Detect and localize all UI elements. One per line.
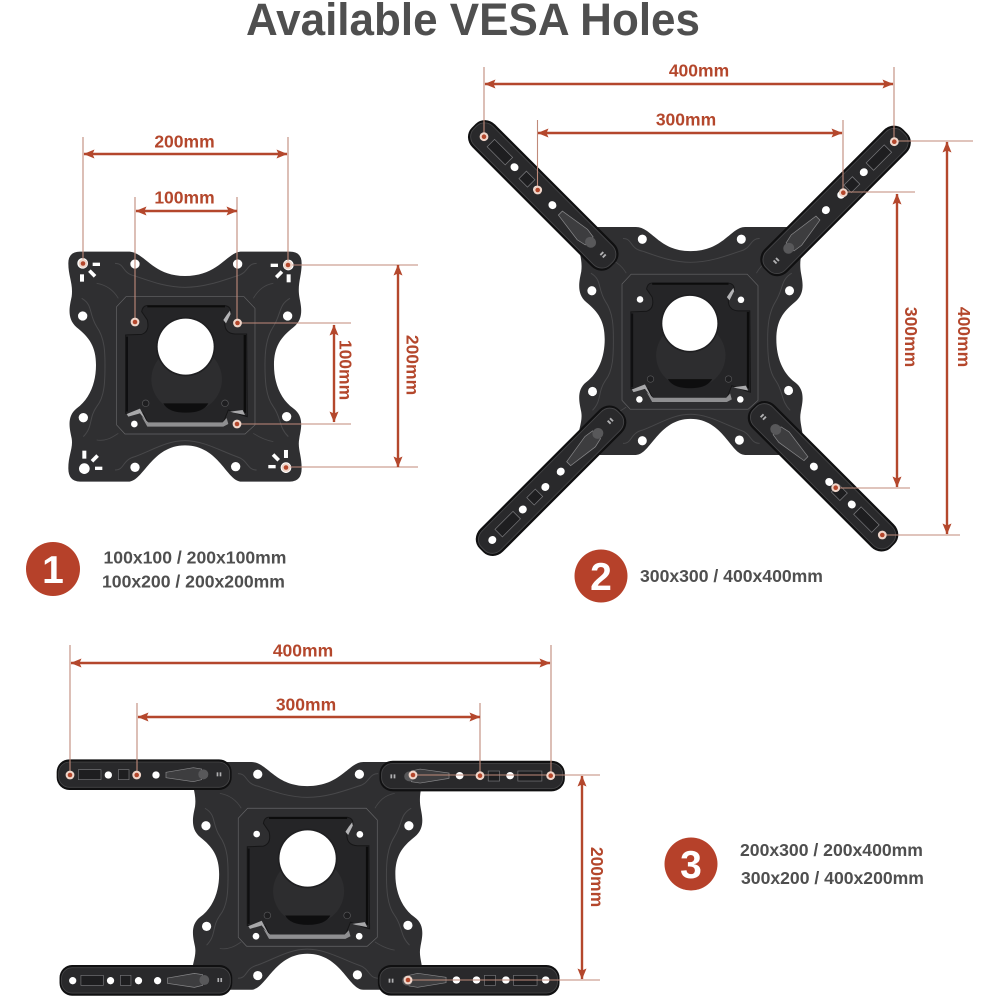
dimension 100mm width bbox=[136, 188, 237, 211]
extension lines 1 bbox=[83, 137, 418, 467]
caption 3: 300x200 / 400x200mm bbox=[741, 868, 924, 888]
dimension 200mm height: 200mm bbox=[587, 847, 607, 907]
extension lines 3 bbox=[70, 645, 600, 980]
dimension 100mm height: 100mm bbox=[336, 340, 356, 400]
dimension 400mm width: 400mm bbox=[669, 60, 729, 80]
caption 3 bbox=[740, 840, 924, 888]
badge 3: 3 bbox=[680, 844, 702, 887]
caption 1: 100x100 / 200x100mm bbox=[104, 548, 286, 568]
dimension 300mm height: 300mm bbox=[901, 307, 921, 367]
bracket 1 plate bbox=[68, 252, 302, 482]
marked holes 2 bbox=[480, 132, 899, 539]
bracket 3 arms bbox=[57, 759, 565, 996]
panel: bracket 2 bbox=[462, 60, 974, 562]
panel: bracket 1 bbox=[68, 132, 423, 482]
dimension 100mm width: 100mm bbox=[154, 188, 215, 208]
badge 2 bbox=[574, 550, 628, 602]
dimension 400mm width: 400mm bbox=[273, 640, 333, 660]
marked holes 1 bbox=[79, 259, 292, 472]
extension lines 2 bbox=[484, 67, 973, 535]
badge 3 bbox=[664, 838, 718, 890]
bracket 3 plate bbox=[192, 762, 423, 990]
dimension 100mm height bbox=[334, 325, 356, 422]
badge 1: 1 bbox=[42, 549, 64, 592]
dimension 400mm height: 400mm bbox=[954, 307, 974, 367]
badge 1 bbox=[26, 542, 80, 596]
caption 2: 300x300 / 400x400mm bbox=[640, 566, 823, 586]
caption 3: 200x300 / 200x400mm bbox=[740, 840, 923, 860]
caption 1 bbox=[102, 548, 286, 592]
badge 2: 2 bbox=[590, 556, 612, 599]
bracket 2 plate bbox=[578, 227, 803, 455]
dimension 300mm width: 300mm bbox=[656, 110, 716, 130]
dimension 300mm width: 300mm bbox=[276, 694, 336, 714]
dimension 200mm height: 200mm bbox=[402, 335, 422, 395]
marked holes 3 bbox=[66, 771, 555, 984]
bracket 2 arms bbox=[462, 114, 917, 562]
caption 1: 100x200 / 200x200mm bbox=[102, 572, 285, 592]
panel: bracket 3 bbox=[57, 640, 607, 996]
dimension 200mm width: 200mm bbox=[154, 132, 215, 152]
